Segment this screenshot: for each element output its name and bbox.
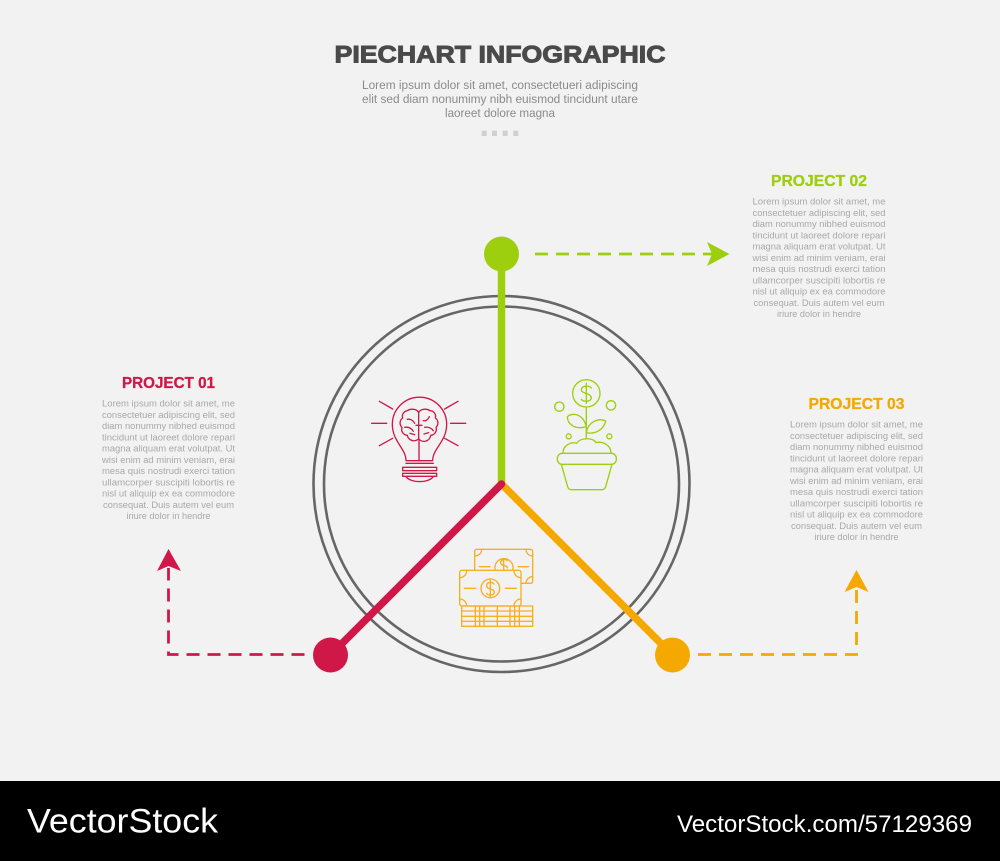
text block: project 02: tincidunt ut laoreet dolore repari (752, 230, 886, 241)
spoke: project 02 green (498, 254, 505, 484)
text block: project 01: Lorem ipsum dolor sit amet, me (102, 398, 235, 410)
text block: project 03: PROJECT 03 (808, 396, 905, 413)
node: project 01 red (313, 638, 348, 672)
text block: project 02: magna aliquam erat volutpat. Ut (752, 242, 886, 252)
text block: project 01: nisl ut aliquip ex ea commodore (102, 488, 235, 500)
text block: project 02: iriure dolor in hendre (777, 309, 861, 320)
icon: banknotes and coins (460, 549, 533, 626)
text block: project 03: tincidunt ut laoreet dolore repari (790, 453, 923, 464)
text block: project 03: Lorem ipsum dolor sit amet, me (790, 420, 923, 430)
text block: project 01: diam nonummy nibhed euismod (102, 421, 235, 432)
footer url: VectorStock.com/57129369 (677, 811, 972, 838)
text block: project 03: magna aliquam erat volutpat. Ut (790, 464, 923, 476)
text block: project 01: PROJECT 01 (122, 375, 215, 392)
spoke: project 01 red (330, 484, 502, 655)
text block: project 01: consectetuer adipiscing elit, sed (102, 410, 235, 421)
title: PIECHART INFOGRAPHIC (334, 41, 666, 68)
text block: project 03: diam nonummy nibhed euismod (790, 442, 923, 453)
text block: project 03 (789, 396, 923, 543)
subtitle text: Lorem ipsum dolor sit amet, consectetueri adipiscing (362, 78, 638, 92)
text block: project 01: iriure dolor in hendre (126, 511, 210, 522)
subtitle text: elit sed diam nonumimy nibh euismod tincidunt utare (362, 92, 638, 106)
text block: project 03: wisi enim ad minim veniam, erai (789, 476, 923, 487)
text block: project 03: consequat. Duis autem vel eum (791, 521, 922, 532)
node: project 03 orange (655, 638, 690, 672)
arrow: project 02 (535, 242, 730, 266)
text block: project 01 (101, 375, 235, 522)
text block: project 02 (752, 173, 886, 320)
text block: project 03: nisl ut aliquip ex ea commodore (790, 510, 923, 520)
text block: project 02: wisi enim ad minim veniam, erai (752, 253, 886, 264)
footer logo: VectorStock (27, 802, 219, 840)
text block: project 02: Lorem ipsum dolor sit amet, me (752, 196, 886, 208)
spoke: project 03 orange (502, 484, 672, 655)
text block: project 02: PROJECT 02 (771, 173, 867, 190)
text block: project 02: diam nonummy nibhed euismod (752, 219, 886, 230)
text block: project 02: ullamcorper suscipiti lobortis re (752, 275, 886, 286)
text block: project 01: mesa quis nostrudi exerci tation (102, 466, 235, 477)
title dots (482, 131, 518, 136)
text block: project 03: iriure dolor in hendre (814, 532, 898, 543)
subtitle text (362, 78, 638, 120)
text block: project 02: consequat. Duis autem vel eum (754, 298, 885, 309)
text block: project 01: magna aliquam erat volutpat. Ut (102, 444, 235, 454)
arrow: project 01 (157, 549, 304, 654)
subtitle text: laoreet dolore magna (445, 106, 555, 120)
footer band (0, 781, 1000, 861)
double ring pie outline (314, 296, 690, 672)
text block: project 02: mesa quis nostrudi exerci tation (752, 264, 886, 275)
arrow: project 03 (698, 570, 868, 654)
text block: project 03: ullamcorper suscipiti lobortis re (790, 498, 923, 509)
text block: project 01: tincidunt ut laoreet dolore repari (102, 432, 235, 443)
node: project 02 green (484, 236, 519, 272)
text block: project 03: consectetuer adipiscing elit, sed (790, 431, 923, 442)
text block: project 03: mesa quis nostrudi exerci tation (790, 487, 923, 498)
icon: money plant in pot (555, 380, 616, 490)
icon: light bulb with brain (372, 397, 466, 482)
text block: project 02: nisl ut aliquip ex ea commodore (752, 286, 886, 298)
text block: project 01: ullamcorper suscipiti lobortis re (102, 477, 235, 488)
text block: project 01: wisi enim ad minim veniam, erai (101, 455, 235, 466)
text block: project 02: consectetuer adipiscing elit, sed (752, 208, 886, 219)
text block: project 01: consequat. Duis autem vel eum (103, 500, 234, 511)
